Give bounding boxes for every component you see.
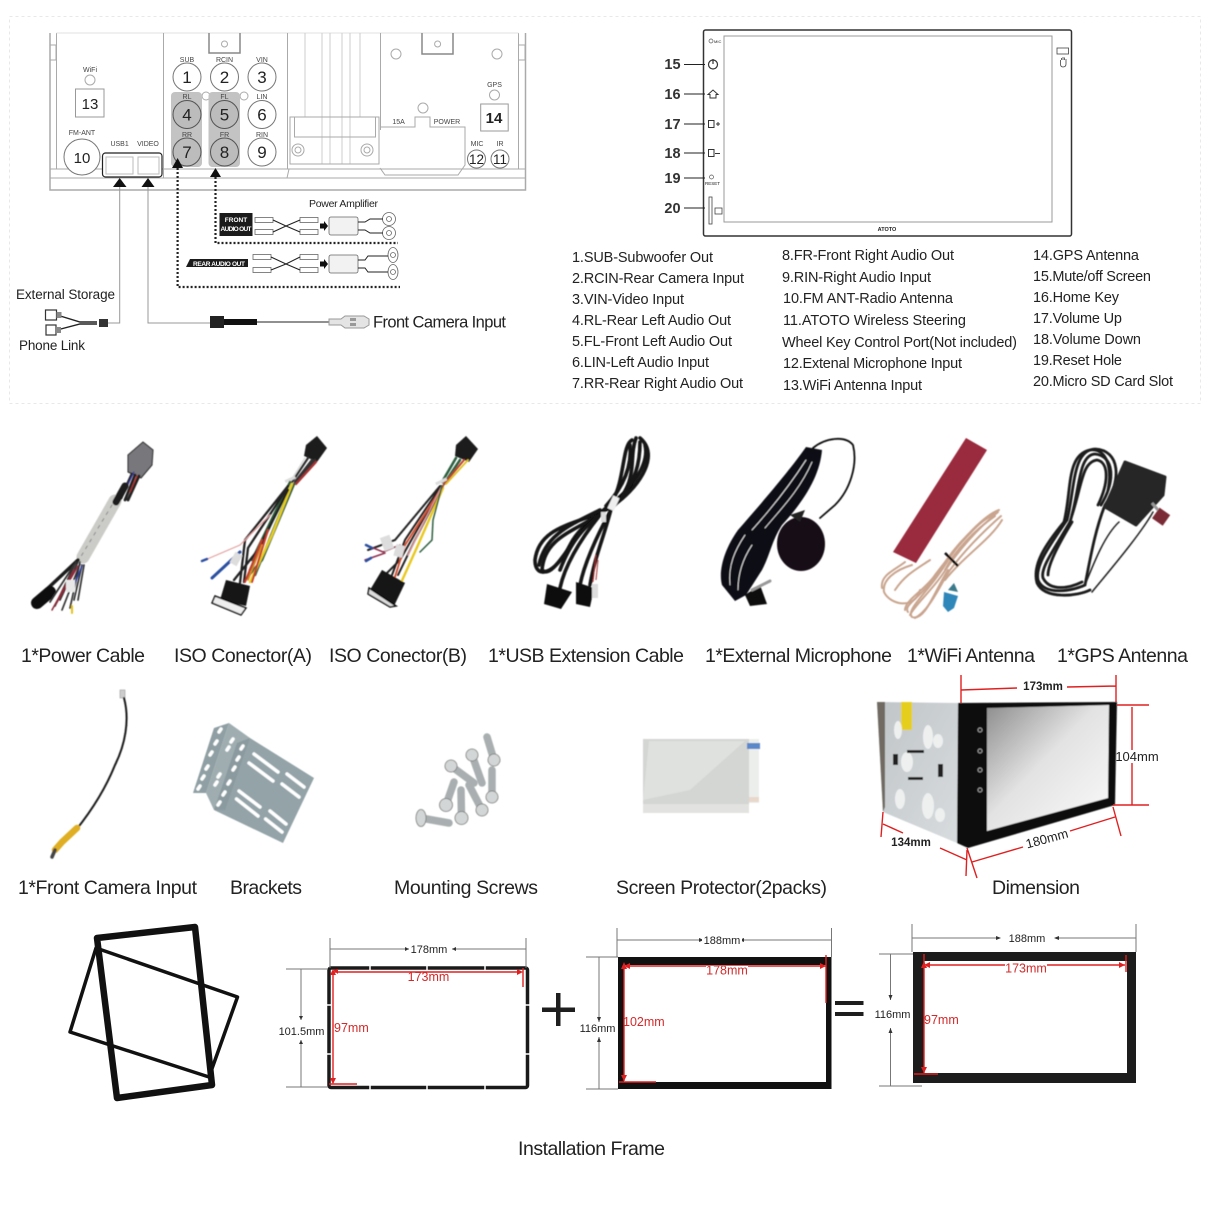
port 2: RCIN xyxy=(216,57,233,64)
rear chassis outline xyxy=(50,33,526,190)
arrows: port pointers xyxy=(113,158,221,187)
legend: rear ports column 2: 9.RIN-Right Audio Input xyxy=(782,270,931,286)
port 8 xyxy=(210,132,238,166)
inner red dimensions: 173mm xyxy=(1005,962,1047,976)
label: brackets: Brackets xyxy=(230,877,302,899)
rear audio out wiring xyxy=(186,248,398,280)
front audio tag: FRONT xyxy=(225,217,247,224)
label: external microphone: 1*External Microphone xyxy=(705,645,892,667)
button 16 callout: 16 xyxy=(664,87,681,103)
photo: USB extension cable xyxy=(535,438,648,609)
front audio tag: AUDIO OUT xyxy=(220,226,252,233)
frame: 178mm by 101.5mm xyxy=(279,938,530,1090)
photo: ISO connector B xyxy=(365,436,478,607)
height dimension: 104mm xyxy=(1115,749,1159,764)
legend: rear ports column 1: 7.RR-Rear Right Audio Out xyxy=(572,376,743,392)
USB1 and VIDEO ports: VIDEO xyxy=(137,141,159,148)
rear audio tag: REAR AUDIO OUT xyxy=(193,261,245,268)
label: GPS antenna: 1*GPS Antenna xyxy=(1057,645,1188,667)
inner red dimensions: 178mm xyxy=(706,964,748,978)
panel: rear connector diagram xyxy=(50,33,526,190)
outer width label: 178mm xyxy=(411,944,447,956)
outer height label: 101.5mm xyxy=(279,1026,324,1038)
port 12 mic xyxy=(468,141,486,168)
button 18 callout: 18 xyxy=(664,146,681,162)
inner red dimensions xyxy=(914,954,1126,1074)
port 12 mic: 12 xyxy=(469,152,484,167)
overlapping frames illustration xyxy=(70,927,238,1098)
photo: GPS antenna xyxy=(1036,449,1170,595)
legend: rear ports column 1: 1.SUB-Subwoofer Out xyxy=(572,250,713,266)
port 11 IR: IR xyxy=(496,141,504,148)
button 17 callout xyxy=(664,117,720,133)
port 5 xyxy=(210,94,238,128)
button 17 callout: 17 xyxy=(664,117,681,133)
photo: external microphone xyxy=(721,439,854,606)
port 4 xyxy=(173,94,201,128)
legend: rear ports column 1: 4.RL-Rear Left Audio Out xyxy=(572,313,731,329)
panel: front unit diagram xyxy=(664,30,1072,236)
button 20 callout: 20 xyxy=(664,201,681,217)
mic hole: MIC xyxy=(714,39,721,44)
port 14 GPS: GPS xyxy=(487,82,502,89)
label: screen protector: Screen Protector(2packs) xyxy=(616,877,827,899)
inner red dimensions xyxy=(329,968,523,1084)
port 11 IR: 11 xyxy=(493,152,507,167)
port 7: 7 xyxy=(182,143,192,162)
label: mounting screws: Mounting Screws xyxy=(394,877,538,899)
label: power cable: 1*Power Cable xyxy=(21,645,145,667)
width dimension: 173mm xyxy=(1023,681,1063,693)
legend: rear ports column 1: 2.RCIN-Rear Camera Input xyxy=(572,271,744,287)
USB1 and VIDEO ports: USB1 xyxy=(110,141,129,148)
outer width label xyxy=(702,934,742,946)
photo: mounting screws xyxy=(416,737,500,826)
port 5: 5 xyxy=(220,106,229,124)
label: ISO connector A: ISO Conector(A) xyxy=(174,645,312,667)
port 6: 6 xyxy=(257,106,267,124)
power label xyxy=(392,119,460,126)
label: ISO connector B: ISO Conector(B) xyxy=(329,645,467,667)
legend: rear ports column 2: 12.Extenal Microphone Input xyxy=(783,356,962,372)
port 1: SUB xyxy=(180,57,195,64)
frame: 188mm by 116mm: 188mm xyxy=(704,935,740,947)
label: WiFi antenna: 1*WiFi Antenna xyxy=(907,645,1035,667)
front audio tag xyxy=(220,213,252,236)
rear audio tag xyxy=(186,259,248,268)
port 2: 2 xyxy=(220,68,229,87)
port 10 FM antenna xyxy=(64,130,100,175)
inner red dimensions: 173mm xyxy=(408,970,449,984)
port 6 xyxy=(248,94,276,128)
outer height label: 116mm xyxy=(875,1009,910,1021)
button 18 callout xyxy=(664,146,720,162)
brand text: ATOTO xyxy=(878,227,897,233)
legend: front controls column 3: 19.Reset Hole xyxy=(1033,353,1122,369)
outer width label: 188mm xyxy=(1009,933,1045,945)
label: front camera input: 1*Front Camera Input xyxy=(18,877,198,899)
legend: rear ports column 1: 3.VIN-Video Input xyxy=(572,292,684,308)
photo: brackets xyxy=(193,723,314,843)
legend: rear ports column 2: 13.WiFi Antenna Input xyxy=(783,378,922,394)
port 14 GPS xyxy=(481,82,508,131)
power label: 15A xyxy=(392,119,405,126)
legend: front controls column 3: 20.Micro SD Card Slot xyxy=(1033,374,1173,390)
legend: rear ports column 1 xyxy=(572,250,744,392)
port 3: 3 xyxy=(257,68,267,87)
port 13 WiFi: WiFi xyxy=(83,67,97,74)
label: USB extension cable: 1*USB Extension Cable xyxy=(488,645,684,667)
inner red dimensions: 97mm xyxy=(334,1021,369,1035)
power amplifier heading: Power Amplifier xyxy=(309,198,378,210)
port 1: 1 xyxy=(182,68,192,87)
label: installation frame: Installation Frame xyxy=(518,1138,665,1160)
button 16 callout xyxy=(664,87,718,103)
port 8: 8 xyxy=(220,143,229,162)
power label: POWER xyxy=(434,119,460,126)
legend: front controls column 3: 16.Home Key xyxy=(1033,290,1120,306)
port 6: LIN xyxy=(257,94,267,101)
outer height label: 116mm xyxy=(580,1023,615,1035)
dotted rear and front audio lines xyxy=(178,168,400,287)
photo: front camera cable xyxy=(52,690,127,857)
depth dimension: 134mm xyxy=(891,837,931,849)
port 9: 9 xyxy=(257,143,267,162)
port 7 xyxy=(173,132,201,166)
photo: power cable xyxy=(37,442,153,613)
front audio out wiring xyxy=(220,212,396,240)
USB1 and VIDEO ports xyxy=(102,141,162,177)
photo: WiFi antenna xyxy=(882,438,1002,618)
port 11 IR xyxy=(491,141,509,168)
legend: rear ports column 2: 11.ATOTO Wireless Steering xyxy=(783,313,966,329)
phone link label: Phone Link xyxy=(19,338,85,353)
port 7: RR xyxy=(182,132,192,139)
front camera input label: Front Camera Input xyxy=(373,314,506,332)
port 2 xyxy=(210,57,238,91)
port 3: VIN xyxy=(256,57,268,64)
inner red dimensions xyxy=(619,955,826,1082)
inner red dimensions: 97mm xyxy=(924,1013,959,1027)
legend: rear ports column 2: 8.FR-Front Right Audio Out xyxy=(782,248,954,264)
touch icon xyxy=(1057,48,1068,67)
legend: rear ports column 2: Wheel Key Control Port(Not included) xyxy=(782,335,1017,351)
plus sign xyxy=(542,993,575,1026)
legend: rear ports column 2: 10.FM ANT-Radio Antenna xyxy=(783,291,954,307)
button 15 callout: 15 xyxy=(664,57,681,73)
legend: front controls column 3: 17.Volume Up xyxy=(1033,311,1122,327)
diagonal width dimension: 180mm xyxy=(1024,826,1070,851)
button 19 callout: 19 xyxy=(664,171,681,187)
external storage and phone link cable xyxy=(16,187,210,353)
photo: device with dimensions xyxy=(877,675,1159,878)
mic hole xyxy=(709,39,721,44)
inner red dimensions: 102mm xyxy=(623,1015,665,1029)
frame: 188mm by 116mm with 173mm opening xyxy=(875,924,1136,1086)
port 14 GPS: 14 xyxy=(486,110,503,127)
button 19 callout: RESET xyxy=(705,181,720,186)
port 5: FL xyxy=(220,94,229,101)
legend: front controls column 3: 15.Mute/off Screen xyxy=(1033,269,1151,285)
legend: rear ports column 2 xyxy=(782,248,1017,394)
port 9: RIN xyxy=(256,132,268,139)
button 15 callout xyxy=(664,57,718,73)
button 20 callout xyxy=(664,197,722,224)
dimension lines xyxy=(881,675,1149,878)
button 19 callout xyxy=(664,171,720,187)
photo: screen protector xyxy=(643,739,760,813)
port 8: FR xyxy=(220,132,229,139)
equals sign xyxy=(835,1001,864,1016)
port 9 xyxy=(248,132,276,166)
port 13 WiFi xyxy=(76,67,104,117)
port 10 FM antenna: FM-ANT xyxy=(69,130,96,137)
legend: rear ports column 1: 6.LIN-Left Audio Input xyxy=(572,355,709,371)
port 10 FM antenna: 10 xyxy=(74,150,90,167)
front camera input cable xyxy=(210,314,506,332)
label: dimension: Dimension xyxy=(992,877,1080,899)
highlighted audio output blocks xyxy=(171,92,240,167)
port 4: 4 xyxy=(182,106,192,124)
port 13 WiFi: 13 xyxy=(82,96,98,113)
screen xyxy=(724,36,1052,222)
port 4: RL xyxy=(183,94,192,101)
port 12 mic: MIC xyxy=(471,141,483,148)
legend: front controls column 3: 18.Volume Down xyxy=(1033,332,1141,348)
legend: front controls column 3 xyxy=(1033,248,1173,390)
external storage label: External Storage xyxy=(16,287,115,302)
legend: front controls column 3: 14.GPS Antenna xyxy=(1033,248,1140,264)
port 3 xyxy=(248,57,276,91)
frame: 188mm by 116mm xyxy=(580,928,832,1089)
legend: rear ports column 1: 5.FL-Front Left Audio Out xyxy=(572,334,732,350)
photo: ISO connector A xyxy=(202,436,327,615)
port 1 xyxy=(173,57,201,91)
